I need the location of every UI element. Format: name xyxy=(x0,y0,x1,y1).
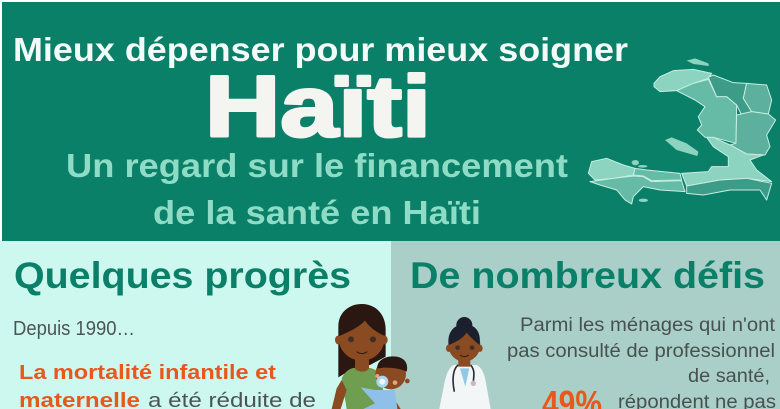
panel: Quelques progrès xyxy=(0,241,410,409)
text: ménages: Parmi les ménages qui n'ont xyxy=(520,315,776,336)
subtitle: de la santé en Haïti xyxy=(153,194,481,231)
illustration: doctor xyxy=(439,317,491,409)
text: depuis 1990: Depuis 1990… xyxy=(13,318,135,340)
text: mortalité xyxy=(19,362,316,409)
subtitle: Un regard sur le financement xyxy=(66,147,568,184)
map of Haiti xyxy=(588,58,776,204)
heading: De nombreux défis: De nombreux défis xyxy=(410,255,765,296)
panel: header xyxy=(2,2,780,241)
panel: De nombreux défis xyxy=(391,241,780,409)
subtitle xyxy=(66,147,568,231)
text: ménages: de santé, xyxy=(688,366,770,387)
text: ménages xyxy=(507,315,776,409)
heading: Haïti: Haïti xyxy=(205,59,431,155)
baby xyxy=(361,356,410,409)
text: mortalité: La mortalité infantile et xyxy=(19,362,276,384)
text: ménages: pas consulté de professionnel xyxy=(507,341,775,362)
heading: Quelques progrès: Quelques progrès xyxy=(14,255,351,296)
illustration: mother and baby xyxy=(332,304,410,409)
title: Mieux dépenser pour mieux soigner xyxy=(13,31,628,68)
